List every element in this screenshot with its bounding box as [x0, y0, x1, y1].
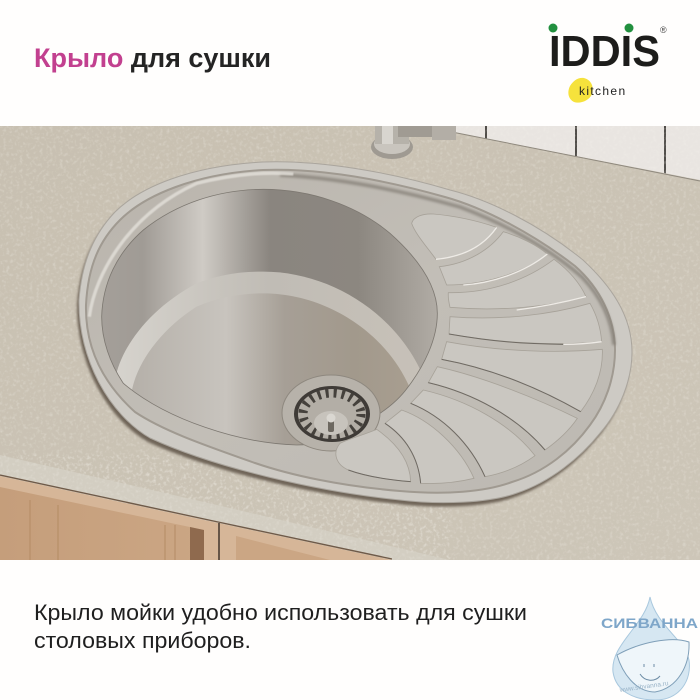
kitchen label: kitchen: [579, 84, 626, 98]
logo wordmark: IDDIS: [549, 27, 660, 76]
drain stopper: [328, 422, 334, 432]
rib 1: [412, 214, 497, 259]
rim highlight: [89, 173, 293, 317]
bowl floor: [132, 293, 410, 453]
rib dark edges: [348, 334, 581, 483]
rib bright edges: [436, 227, 602, 344]
sink shadow: [76, 223, 629, 508]
drain collar: [282, 375, 380, 451]
faucet: [371, 126, 456, 159]
registered mark: ®: [660, 25, 667, 35]
watermark bath: [617, 640, 689, 692]
title: Крыло для сушки: [34, 43, 271, 73]
countertop front edge: [0, 455, 450, 560]
watermark drop: [613, 597, 689, 700]
drain: [282, 375, 380, 451]
rib 4: [449, 303, 602, 344]
rib 9: [336, 429, 411, 482]
rib 7: [411, 390, 535, 477]
bowl ridge: [117, 272, 420, 390]
watermark name: СИБВАННА: [601, 615, 698, 631]
yellow blob: [568, 78, 593, 103]
watermark url: www.sibvanna.ru: [618, 680, 669, 694]
description text: Крыло мойки удобно использовать для сушки: [34, 600, 527, 625]
photo: kitchen sink: [0, 126, 700, 560]
description text: столовых приборов.: [34, 628, 251, 653]
sink deck: [86, 170, 615, 493]
drain strainer: [294, 386, 370, 442]
countertop: [0, 126, 700, 560]
logo dots: [548, 24, 634, 32]
sink rim: [79, 162, 632, 503]
logo: iddis kitchen: [548, 24, 667, 103]
bowl: [89, 173, 447, 457]
backsplash tiles: [456, 126, 700, 180]
rib 5: [442, 342, 602, 412]
rib 8: [385, 410, 474, 483]
cabinet doors: [0, 475, 392, 560]
watermark: sibvanna: [601, 597, 698, 700]
rib 3: [448, 259, 586, 309]
drying wing: [336, 214, 602, 483]
bowl wall: [102, 190, 437, 372]
rim dark band: [280, 175, 614, 345]
watermark bath face: [640, 664, 660, 680]
rib 6: [428, 367, 577, 450]
rib 2: [439, 232, 547, 285]
